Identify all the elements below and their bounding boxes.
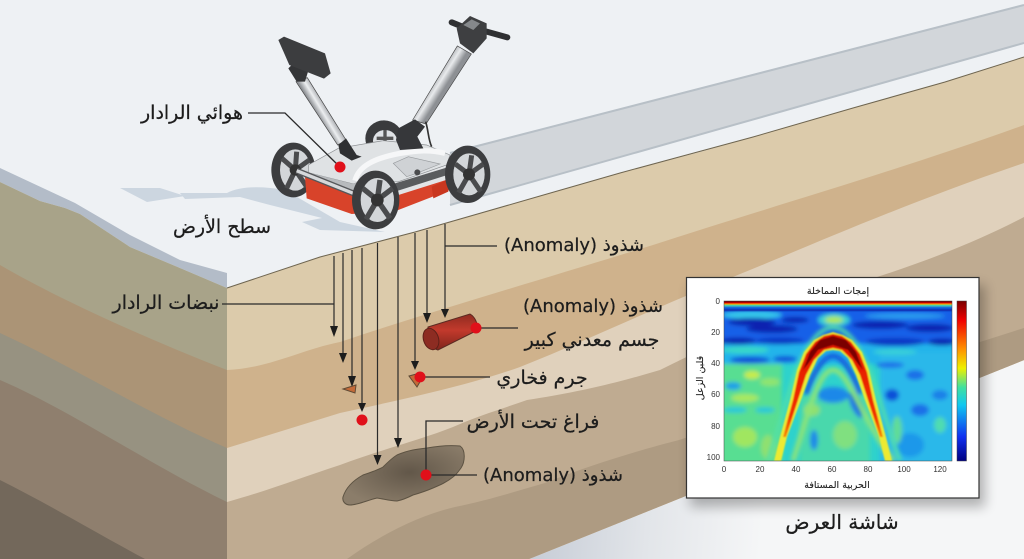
grey surface strip bbox=[450, 5, 1024, 205]
label: pottery: جرم فخاري bbox=[496, 367, 588, 389]
label: subsurface void: فراغ تحت الأرض bbox=[467, 410, 599, 433]
pottery shard right bbox=[409, 373, 421, 387]
label: anomaly bottom: شذوذ (Anomaly) bbox=[483, 465, 623, 486]
background below block bbox=[529, 360, 1024, 559]
label: radar pulses: نبضات الرادار bbox=[112, 292, 219, 314]
label: display screen: شاشة العرض bbox=[785, 510, 899, 534]
top reflection band bbox=[715, 304, 960, 311]
label: radar antenna: هوائي الرادار bbox=[140, 102, 243, 124]
panel: display screen bbox=[686, 278, 980, 498]
y axis labels bbox=[707, 297, 721, 462]
label: large metal object: شذوذ (Anomaly) bbox=[523, 296, 663, 317]
block front edge bbox=[0, 168, 227, 288]
device: GPR cart bbox=[271, 16, 507, 229]
radar pulses arrows bbox=[330, 224, 449, 465]
label: anomaly top: شذوذ (Anomaly) bbox=[504, 235, 644, 256]
x axis labels: 20 bbox=[756, 465, 765, 474]
y axis labels: 20 bbox=[711, 328, 721, 337]
x axis labels: 0 bbox=[722, 465, 727, 474]
y axis labels: 60 bbox=[711, 390, 721, 399]
label: pottery bbox=[414, 367, 588, 389]
y axis labels: 40 bbox=[711, 359, 721, 368]
left handle bbox=[288, 57, 362, 161]
cart shadow bbox=[120, 187, 385, 232]
x axis title: الحربية المستافة bbox=[804, 480, 870, 491]
secondary arcs bbox=[768, 327, 900, 461]
right soil face bbox=[227, 57, 1024, 559]
chart title: إمجات المماخلة bbox=[807, 286, 869, 297]
x axis labels: 60 bbox=[828, 465, 837, 474]
y axis title: قلبن الزعل bbox=[695, 356, 706, 400]
radargram heatmap bbox=[724, 301, 952, 461]
colour bar bbox=[957, 301, 966, 461]
metal cylinder object bbox=[420, 314, 478, 352]
left soil face bbox=[0, 182, 227, 559]
x axis labels: 100 bbox=[897, 465, 911, 474]
right wheel bbox=[445, 146, 490, 203]
label: anomaly bottom bbox=[420, 465, 623, 486]
main hyperbola bbox=[774, 332, 892, 461]
x axis labels: 80 bbox=[864, 465, 873, 474]
display tablet bbox=[278, 37, 331, 79]
left wheel bbox=[271, 143, 315, 197]
surface edge line bbox=[227, 57, 1024, 288]
front wheel bbox=[352, 171, 399, 229]
x axis labels bbox=[722, 465, 947, 474]
pottery shard left bbox=[343, 385, 356, 393]
x axis labels: 120 bbox=[933, 465, 947, 474]
right handle bbox=[396, 16, 507, 150]
y axis labels: 80 bbox=[711, 422, 721, 431]
body shell bbox=[308, 141, 450, 195]
y axis labels: 0 bbox=[716, 297, 721, 306]
y axis labels: 100 bbox=[707, 453, 721, 462]
front tube bbox=[297, 171, 355, 194]
label: subsurface void bbox=[426, 410, 599, 475]
label: ground surface: سطح الأرض bbox=[173, 215, 271, 238]
cart base bbox=[305, 165, 457, 214]
plot frame bbox=[724, 301, 952, 461]
label: large metal object bbox=[470, 296, 663, 351]
back wheel bbox=[365, 120, 403, 156]
label: large metal object: جسم معدني كبير bbox=[524, 329, 659, 351]
underground void bbox=[343, 446, 464, 505]
label: radar antenna bbox=[140, 102, 346, 172]
x axis labels: 40 bbox=[792, 465, 801, 474]
red marker: small target bbox=[356, 414, 368, 426]
panel shadow bbox=[690, 285, 985, 507]
